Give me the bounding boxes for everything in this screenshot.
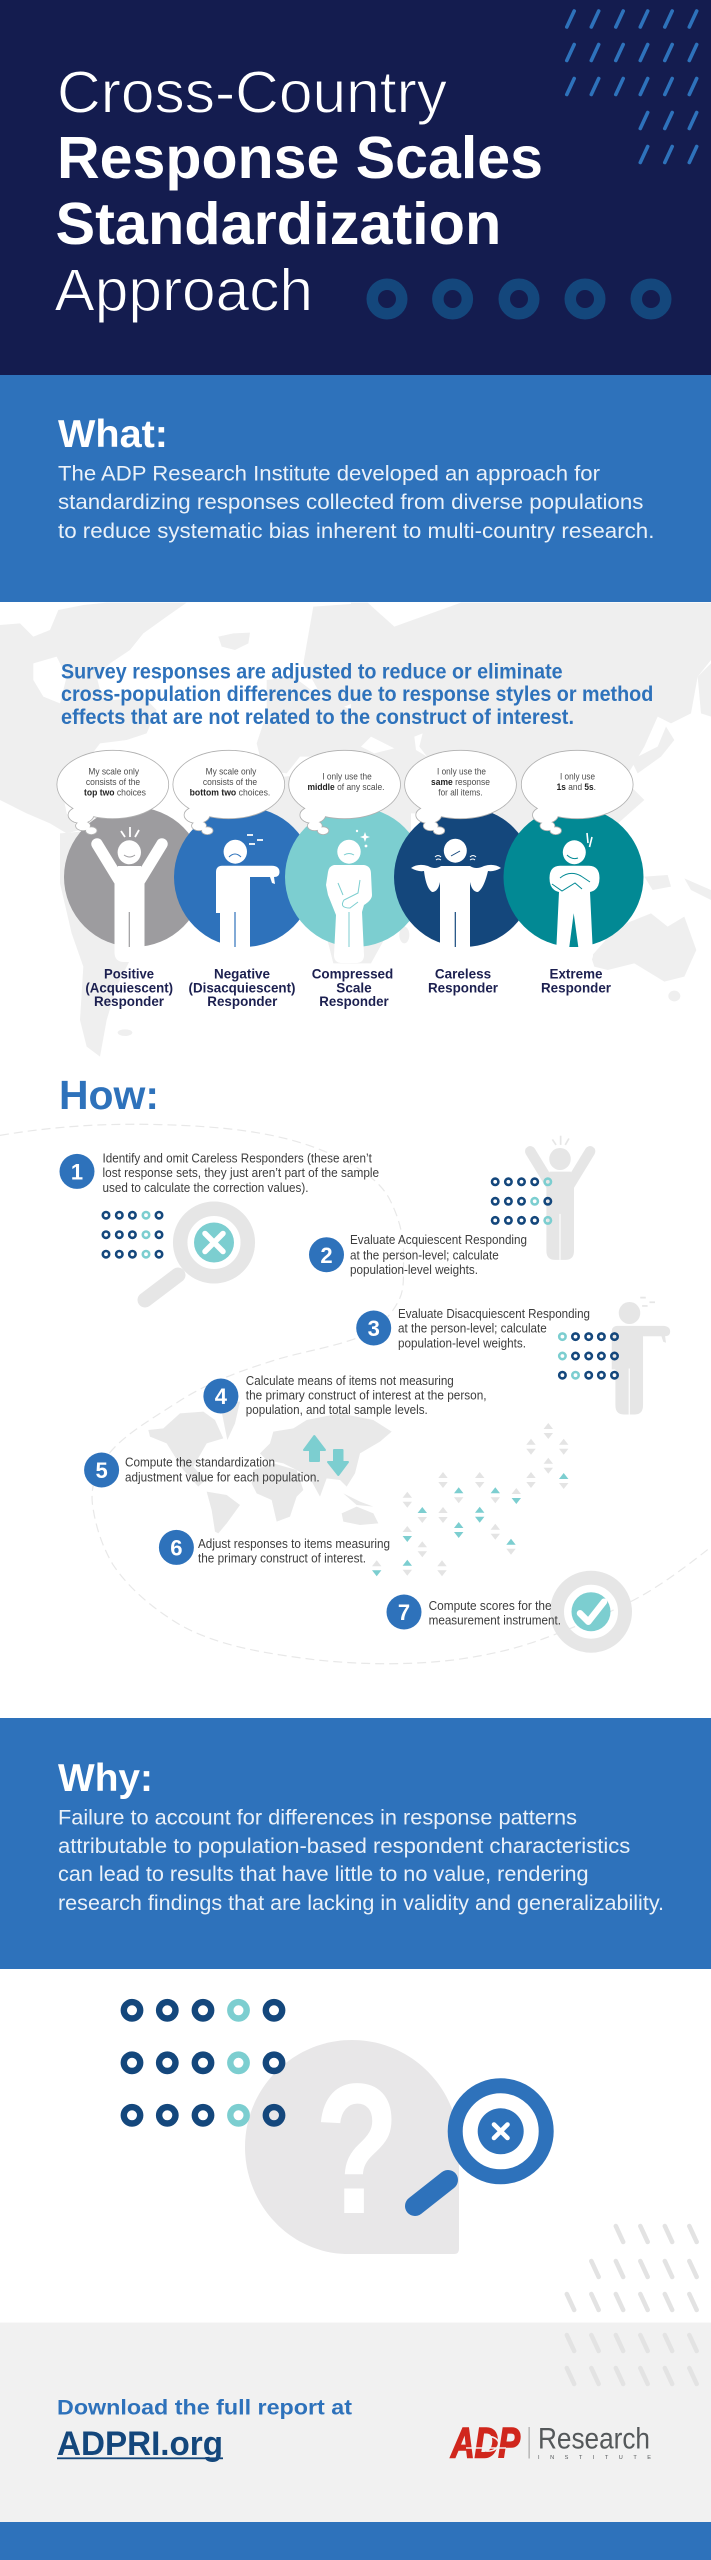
step 5: [84, 1452, 320, 1488]
icon: row of five rings: [372, 284, 666, 314]
step 1: Identify and omit Careless Responders (these aren’t: [102, 1150, 372, 1165]
callout: negative responder bubble: consists of the: [203, 777, 257, 787]
step 1: lost response sets, they just aren’t part of the sample: [102, 1165, 379, 1180]
step 4: Calculate means of items not measuring: [246, 1373, 454, 1388]
icon: responder circles: [64, 807, 644, 947]
step 6: the primary construct of interest.: [198, 1550, 366, 1566]
heading: how: How:: [59, 1072, 159, 1118]
step 1: 1: [71, 1160, 83, 1184]
dashed route line: [0, 1124, 711, 1664]
icon: blue magnifier: [415, 2086, 546, 2206]
step 3: Evaluate Disacquiescent Responding: [398, 1306, 590, 1321]
text: why description: Failure to account for differences in response patterns: [58, 1806, 577, 1829]
callout: compressed scale responder bubble: [289, 751, 400, 834]
text: compressed scale responder label: [312, 966, 393, 1009]
step 5: adjustment value for each population.: [125, 1470, 320, 1484]
text: extreme responder label: [541, 966, 612, 995]
step 4: the primary construct of interest at the person,: [246, 1388, 487, 1402]
step 7: measurement instrument.: [429, 1613, 561, 1628]
text: survey responses statement: effects that are not related to the construct of interest.: [61, 706, 574, 729]
callout: careless responder bubble: same response: [431, 777, 490, 787]
text: careless responder label: Careless: [435, 967, 491, 982]
text: survey responses statement: [61, 660, 653, 729]
text: download prompt: Download the full report at: [57, 2397, 352, 2420]
step 7: [386, 1594, 561, 1630]
icon: response dots group two: [492, 1179, 551, 1224]
step 7: Compute scores for the: [429, 1598, 552, 1613]
text: why description: attributable to population-based respondent characteristics: [58, 1835, 630, 1858]
step 2: population-level weights.: [350, 1262, 478, 1277]
text: negative responder label: Negative: [214, 966, 270, 981]
callout: negative responder bubble: bottom two choices.: [190, 788, 270, 798]
callout: positive responder bubble: consists of the: [86, 777, 140, 787]
text: extreme responder label: Responder: [541, 980, 612, 995]
heading: why: Why:: [58, 1757, 153, 1800]
step 3: [356, 1306, 590, 1350]
step 6: 6: [170, 1535, 183, 1560]
step 4: population, and total sample levels.: [246, 1402, 428, 1417]
text: what description: [58, 462, 654, 543]
callout: careless responder bubble: [405, 751, 516, 834]
panel: why: [0, 1718, 711, 1969]
panel: footer: [0, 2226, 711, 2522]
step 6: Adjust responses to items measuring: [198, 1536, 390, 1551]
icon: response dots group three: [559, 1333, 618, 1378]
step 7: 7: [398, 1600, 410, 1625]
callout: positive responder bubble: top two choices: [84, 788, 146, 798]
panel: world map background: [0, 603, 711, 1057]
text: survey responses statement: Survey responses are adjusted to reduce or eliminate: [61, 660, 563, 683]
bottom bar: [0, 2522, 711, 2560]
panel: what: [0, 375, 711, 602]
text: positive responder label: Responder: [94, 994, 165, 1009]
text: negative responder label: [188, 966, 296, 1009]
text: report link: ADPRI.org: [57, 2425, 223, 2463]
panel: how: [0, 1072, 711, 1664]
icon: question speech bubble: [245, 2040, 459, 2254]
icon: ADP Research Institute logo: [450, 2420, 651, 2468]
icon: magnifier with cross: [145, 1209, 248, 1300]
text: negative responder label: (Disacquiescent): [188, 980, 296, 995]
icon: gray positive figure: [530, 1136, 590, 1260]
step 1: [60, 1150, 379, 1195]
step 5: 5: [95, 1458, 108, 1483]
icon: up and down triangle scatter: [372, 1423, 568, 1576]
icon: compressed scale responder figure: [326, 830, 372, 963]
step 3: at the person-level; calculate: [398, 1321, 547, 1336]
icon: careless responder figure: [411, 839, 501, 962]
step 4: 4: [215, 1384, 228, 1409]
step 3: population-level weights.: [398, 1336, 526, 1350]
text: positive responder label: Positive: [104, 966, 154, 981]
step 2: at the person-level; calculate: [350, 1247, 499, 1262]
text: careless responder label: Responder: [428, 980, 499, 996]
callout: careless responder bubble: I only use the: [437, 766, 486, 776]
text: why description: can lead to results that have little to no value, rendering: [58, 1863, 589, 1886]
step 6: [159, 1530, 390, 1566]
text: compressed scale responder label: Responder: [319, 994, 389, 1009]
callout: negative responder bubble: My scale only: [206, 766, 257, 776]
step 4: [203, 1373, 487, 1417]
text: compressed scale responder label: Scale: [336, 980, 372, 995]
text: extreme responder label: Extreme: [550, 966, 603, 981]
callout: negative responder bubble: [173, 751, 284, 834]
icon: large response dots: [124, 2002, 282, 2124]
text: careless responder label: [428, 967, 499, 996]
icon: ADP Research Institute logo: Research: [538, 2422, 650, 2455]
text: what description: The ADP Research Institute developed an approach for: [58, 462, 600, 485]
icon: gray negative figure: [612, 1298, 670, 1414]
icon: ADP Research Institute logo: INSTITUTE: [538, 2455, 651, 2461]
decorative slash pattern: [567, 11, 697, 162]
step 5: Compute the standardization: [125, 1455, 275, 1470]
icon: response dots group one: [103, 1212, 162, 1257]
text: compressed scale responder label: Compressed: [312, 966, 393, 981]
heading: what: What:: [58, 413, 168, 456]
decorative gray slash pattern: [567, 2226, 697, 2384]
icon: magnifier with check mark: [557, 1578, 625, 1646]
text: negative responder label: Responder: [207, 994, 278, 1009]
callout: extreme responder bubble: [522, 751, 633, 834]
icon: extreme responder figure: [550, 833, 600, 962]
title: Approach: [54, 257, 313, 323]
icon: small world map: [148, 1402, 392, 1533]
icon: positive responder figure: [97, 827, 162, 962]
text: survey responses statement: cross-population differences due to response styles or method: [61, 683, 653, 706]
title: Standardization: [56, 191, 501, 257]
icon: question speech bubble: ?: [314, 2046, 400, 2253]
text: why description: research findings that are lacking in validity and generalizability.: [58, 1892, 664, 1915]
step 2: Evaluate Acquiescent Responding: [350, 1232, 527, 1247]
callout: compressed scale responder bubble: middle of any scale.: [308, 782, 384, 792]
step 3: 3: [368, 1316, 380, 1341]
callout: extreme responder bubble: I only use: [560, 771, 595, 781]
step 2: 2: [320, 1243, 333, 1268]
step 1: used to calculate the correction values).: [102, 1180, 308, 1195]
icon: negative responder figure: [216, 835, 280, 962]
callout: careless responder bubble: for all items.: [438, 788, 483, 798]
text: why description: [58, 1806, 664, 1915]
callout: positive responder bubble: [57, 751, 168, 834]
text: positive responder label: [85, 966, 173, 1009]
text: what description: standardizing responses collected from diverse populations: [58, 491, 643, 514]
panel: header: [0, 0, 711, 375]
title: Cross-Country: [57, 60, 448, 126]
callout: positive responder bubble: My scale only: [88, 766, 140, 776]
step 2: [309, 1232, 527, 1277]
callout: compressed scale responder bubble: I only use the: [322, 771, 372, 781]
title: Response Scales: [57, 125, 543, 191]
icon: ADP Research Institute logo: ADP: [450, 2420, 520, 2468]
panel: responder types: [57, 751, 644, 1009]
title: [54, 60, 543, 323]
callout: extreme responder bubble: 1s and 5s.: [557, 782, 596, 792]
icon: up and down arrows: [304, 1436, 348, 1475]
text: positive responder label: (Acquiescent): [85, 980, 173, 995]
text: what description: to reduce systematic bias inherent to multi-country research.: [58, 520, 654, 543]
